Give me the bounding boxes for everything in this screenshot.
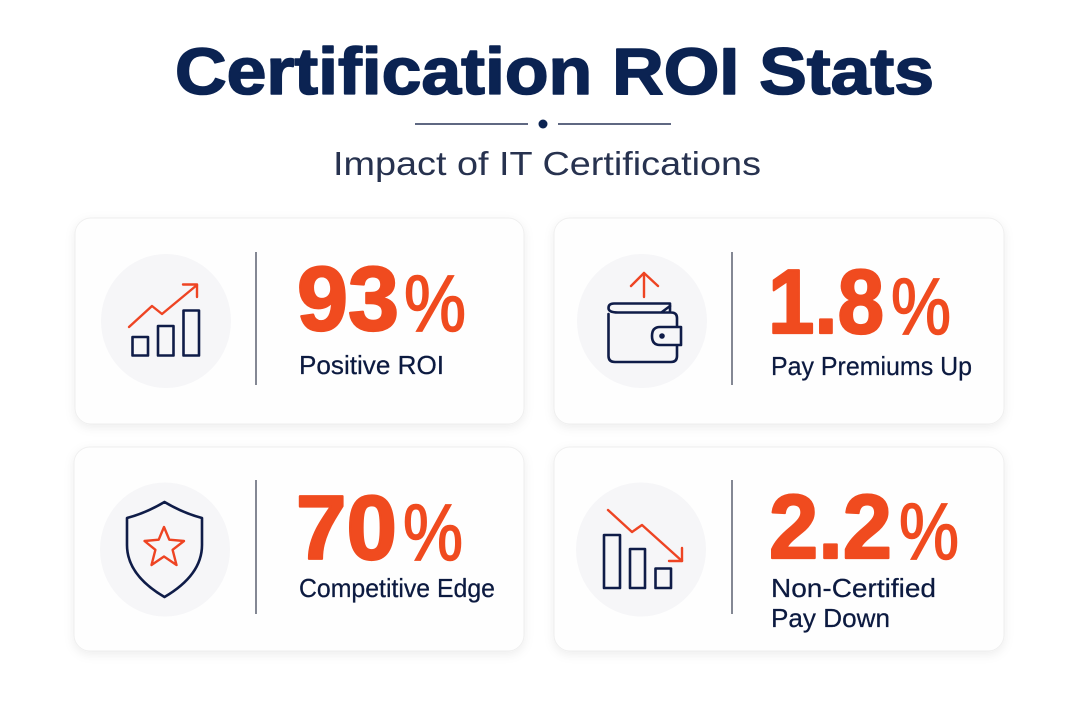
divider xyxy=(255,480,257,614)
stat: 1.8% xyxy=(768,252,951,353)
label: Pay Down xyxy=(771,603,890,633)
label: Competitive Edge xyxy=(299,573,495,603)
label: Pay Premiums Up xyxy=(771,351,972,381)
stat: 2.2% xyxy=(769,477,959,578)
icon: rising bar chart xyxy=(101,254,231,388)
stat: 2.2%: % xyxy=(899,487,959,576)
panel: non-certified pay down xyxy=(554,447,1004,651)
title: Certification ROI Stats xyxy=(175,34,934,108)
subtitle: Impact of IT Certifications xyxy=(333,145,761,182)
card background xyxy=(554,218,1004,424)
divider xyxy=(255,252,257,385)
stat: 70% xyxy=(296,478,463,579)
card background xyxy=(75,218,524,424)
title divider xyxy=(415,120,671,128)
stat: 1.8%: 1.8 xyxy=(768,252,884,353)
stat: 70%: 70 xyxy=(296,478,397,579)
icon: wallet with up arrow xyxy=(577,254,707,388)
label: Non-Certified xyxy=(771,573,936,603)
stat: 1.8%: % xyxy=(891,262,951,351)
stat: 2.2%: 2.2 xyxy=(769,477,892,578)
panel: positive ROI xyxy=(75,218,524,424)
icon: shield with star xyxy=(100,482,230,616)
panel: competitive edge xyxy=(74,447,524,651)
panel: pay premiums up xyxy=(554,218,1004,424)
card background xyxy=(74,447,524,651)
label xyxy=(771,573,936,633)
stat: 93%: 93 xyxy=(297,249,399,350)
stat: 93%: % xyxy=(404,259,466,348)
stat: 93% xyxy=(297,249,466,350)
icon: falling bar chart xyxy=(576,482,706,616)
divider xyxy=(731,252,733,385)
label: Positive ROI xyxy=(299,350,444,380)
divider xyxy=(731,480,733,614)
card background xyxy=(554,447,1004,651)
stat: 70%: % xyxy=(403,488,463,577)
